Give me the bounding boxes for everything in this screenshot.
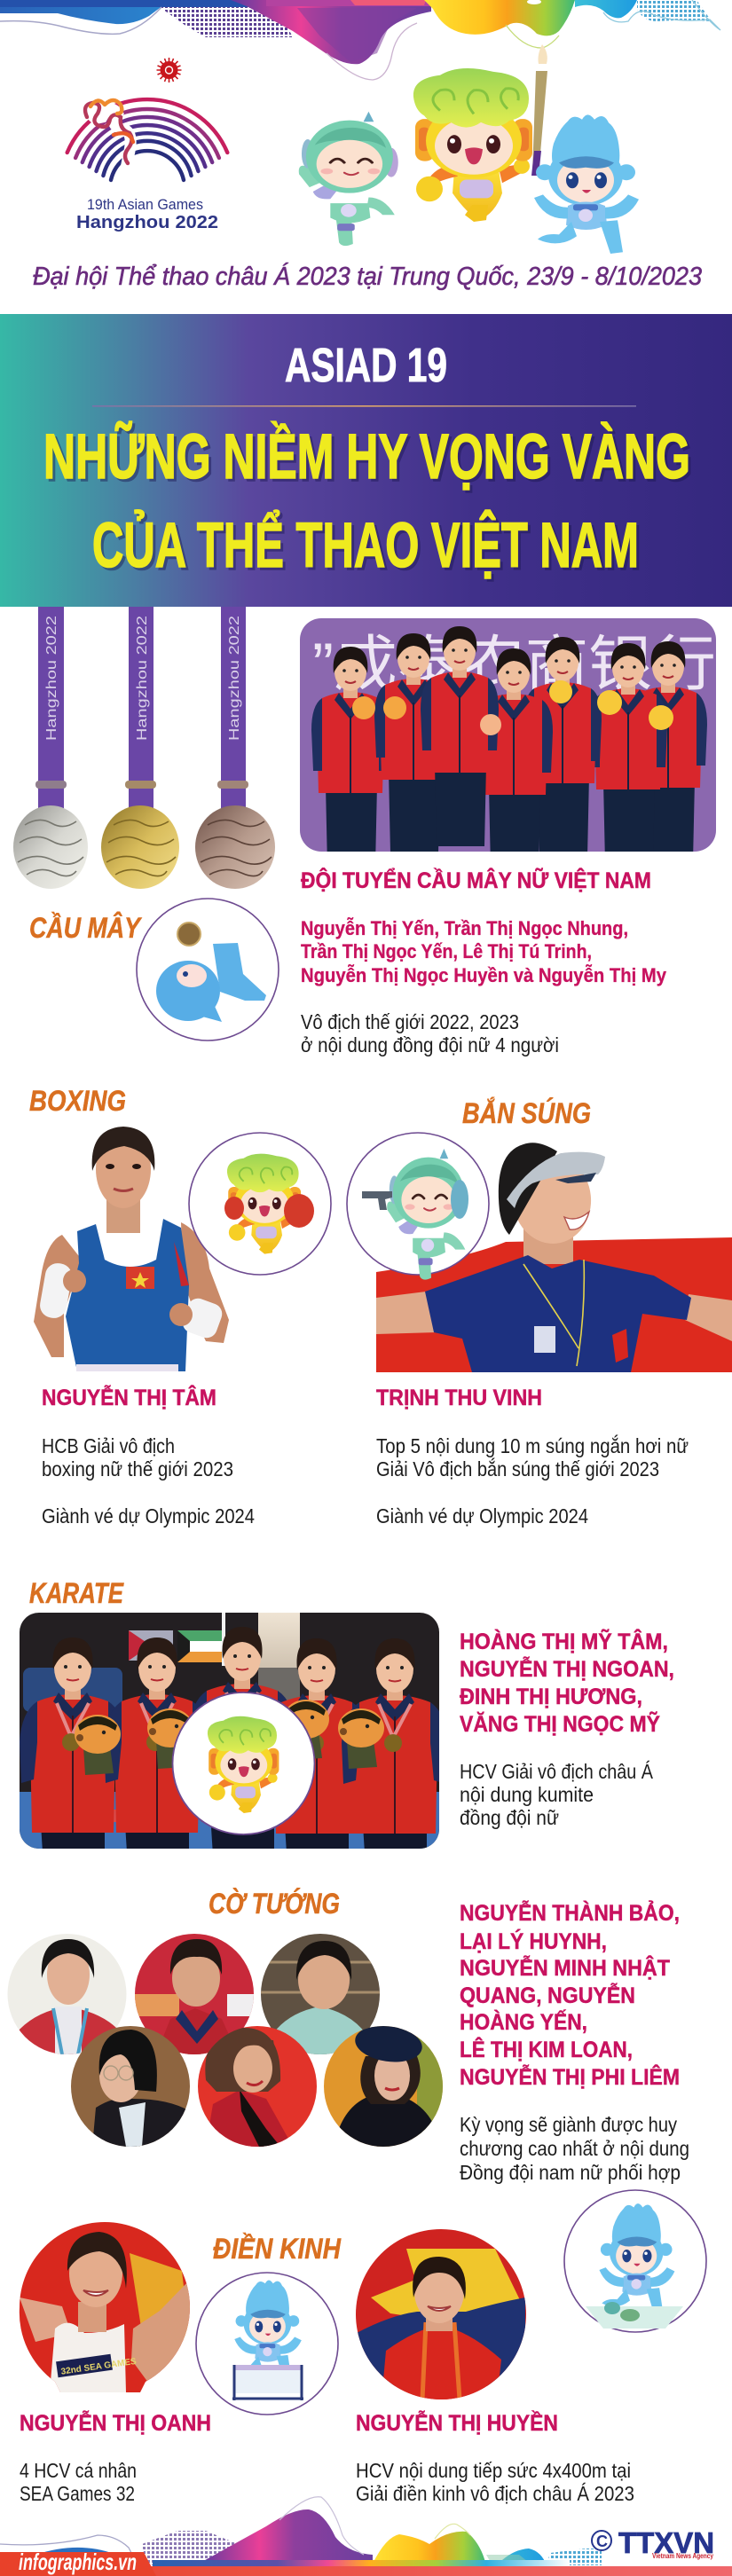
mascot circle: shooting [347, 1133, 489, 1280]
mascot circle: boxing [189, 1133, 331, 1275]
photo: Nguyễn Thị Oanh [18, 2218, 192, 2395]
text block: Nguyễn Thị Tâm: boxing nữ thế giới 2023 [42, 1457, 233, 1480]
text block: Nguyễn Thị Tâm: Giành vé dự Olympic 2024 [42, 1504, 255, 1528]
mascot circle: athletics hurdles [196, 2273, 338, 2415]
text block: Trịnh Thu Vinh [376, 1386, 689, 1528]
footer red bar [0, 2566, 732, 2576]
text block: Nguyễn Thị Oanh: 4 HCV cá nhân [20, 2459, 137, 2482]
portrait 3 [260, 1934, 381, 2054]
logo: 19th Asian Games Hangzhou 2022: Hangzhou 2022 [76, 213, 218, 232]
photo: women's sepak takraw team [300, 618, 716, 868]
text block: Nguyễn Thị Huyền: Giải điền kinh vô địch châu Á 2023 [356, 2482, 634, 2505]
mascot: yellow with torch [413, 44, 547, 222]
subtitle: event dates: Đại hội Thể thao châu Á 2023 tại Trung Quốc, 23/9 - 8/10/2023 [33, 262, 702, 291]
text block: karate names: HOÀNG THỊ MỸ TÂM, [460, 1628, 668, 1654]
logo: 19th Asian Games Hangzhou 2022: 19th Asian Games [87, 196, 203, 213]
mascot circle: sepak takraw [137, 899, 279, 1041]
text block: Nguyễn Thị Tâm: NGUYỄN THỊ TÂM [42, 1384, 216, 1410]
text block: Cầu mây team: Vô địch thế giới 2022, 2023 [301, 1010, 519, 1033]
text block: Cờ tướng names: NGUYỄN THỊ PHI LIÊM [460, 2063, 680, 2090]
text block: Cờ tướng names [460, 1899, 689, 2184]
gold medal: Hangzhou 2022 [135, 616, 150, 741]
heading: ASIAD 19: ASIAD 19 [285, 339, 447, 392]
text block: karate names: NGUYỄN THỊ NGOAN, [460, 1655, 674, 1682]
text block: Trịnh Thu Vinh: Giải Vô địch bắn súng thế giới 2023 [376, 1457, 659, 1480]
panel: title banner [0, 314, 732, 607]
text block: Cờ tướng names: HOÀNG YẾN, [460, 2009, 587, 2035]
text block: Nguyễn Thị Tâm: HCB Giải vô địch [42, 1434, 175, 1457]
gold medal [101, 607, 179, 889]
logo: 19th Asian Games Hangzhou 2022 [67, 99, 227, 232]
portrait 5 [197, 2026, 318, 2147]
bottom rainbow wave [0, 2497, 602, 2567]
footer tab: infographics.vn: infographics.vn [19, 2549, 137, 2575]
section label: Điền kinh: ĐIỀN KINH [213, 2233, 342, 2265]
text block: Cầu mây team: Nguyễn Thị Ngọc Huyền và Nguyễn Thị My [301, 964, 667, 986]
text block: Cờ tướng names: NGUYỄN THÀNH BẢO, [460, 1899, 680, 1926]
icon: asian games sun emblem [156, 58, 181, 82]
text block: Nguyễn Thị Oanh [20, 2409, 211, 2505]
portrait 2 [135, 1934, 256, 2054]
text block: Cầu mây team: ở nội dung đồng đội nữ 4 người [301, 1033, 559, 1056]
logo: TTXVN: C [596, 2533, 608, 2550]
text block: Nguyễn Thị Oanh: SEA Games 32 [20, 2482, 135, 2505]
text block: Cờ tướng names: LÊ THỊ KIM LOAN, [460, 2036, 633, 2062]
text block: Cờ tướng names: Đồng đội nam nữ phối hợp [460, 2161, 681, 2184]
section label: Boxing: BOXING [29, 1085, 126, 1117]
photo: karate team [20, 1613, 439, 1849]
text block: karate names [460, 1628, 674, 1829]
text block: Trịnh Thu Vinh: TRỊNH THU VINH [376, 1386, 542, 1410]
bronze medal [195, 607, 275, 889]
text block: Cầu mây team: Nguyễn Thị Yến, Trần Thị Ngọc Nhung, [301, 917, 628, 939]
section label: Cờ tướng: CỜ TƯỚNG [209, 1888, 340, 1920]
text block: karate names: VĂNG THỊ NGỌC MỸ [460, 1710, 660, 1737]
mascot circle: karate [172, 1692, 314, 1834]
text block: Cờ tướng names: chương cao nhất ở nội dung [460, 2137, 689, 2160]
text block: karate names: HCV Giải vô địch châu Á [460, 1760, 654, 1783]
text block: Cầu mây team [301, 867, 667, 1056]
section label: Karate: KARATE [29, 1577, 124, 1609]
heading: main title [43, 422, 693, 584]
medals with ribbons [13, 607, 275, 889]
text block: Nguyễn Thị Tâm [42, 1384, 255, 1528]
text block: Cờ tướng names: LẠI LÝ HUYNH, [460, 1928, 607, 1954]
photo: Nguyễn Thị Huyền [355, 2228, 528, 2401]
mascot: blue [534, 114, 639, 254]
photo: women's sepak takraw team: ”成泰农商银行 [312, 631, 716, 698]
bronze medal: Hangzhou 2022 [227, 616, 242, 741]
text block: Nguyễn Thị Huyền: HCV nội dung tiếp sức 4x400m tại [356, 2459, 631, 2482]
text block: Cờ tướng names: QUANG, NGUYỄN [460, 1982, 635, 2008]
section label: Cầu mây: CẦU MÂY [29, 912, 142, 944]
mascot: green [299, 112, 398, 246]
text block: Cầu mây team: ĐỘI TUYỂN CẦU MÂY NỮ VIỆT NAM [301, 867, 651, 893]
text block: Cờ tướng names: NGUYỄN MINH NHẬT [460, 1954, 670, 1981]
portrait 6 [323, 2022, 444, 2147]
section label: Bắn súng: BẮN SÚNG [462, 1097, 591, 1129]
photo: boxer Nguyễn Thị Tâm [34, 1127, 229, 1371]
text block: Trịnh Thu Vinh: Top 5 nội dung 10 m súng ngắn hơi nữ [376, 1434, 689, 1457]
text block: Nguyễn Thị Huyền: NGUYỄN THỊ HUYỀN [356, 2409, 558, 2436]
text block: Nguyễn Thị Oanh: NGUYỄN THỊ OANH [20, 2409, 211, 2436]
photo: shooter Trịnh Thu Vinh [376, 1143, 732, 1372]
photo: Nguyễn Thị Oanh: 32nd SEA GAMES [60, 2357, 138, 2377]
portrait 4 [70, 2026, 191, 2147]
text block: karate names: nội dung kumite [460, 1783, 594, 1806]
logo: TTXVN: Vietnam News Agency [652, 2552, 713, 2560]
mascot circle: xiangqi [564, 2190, 706, 2332]
top rainbow wave [0, 0, 720, 80]
text block: Cờ tướng names: Kỳ vọng sẽ giành được huy [460, 2113, 677, 2136]
text block: Trịnh Thu Vinh: Giành vé dự Olympic 2024 [376, 1504, 588, 1528]
text block: Cầu mây team: Trần Thị Ngọc Yến, Lê Thị Tú Trinh, [301, 940, 592, 962]
portrait 1 [7, 1934, 127, 2054]
text block: Nguyễn Thị Huyền [356, 2409, 634, 2505]
silver medal: Hangzhou 2022 [44, 616, 59, 741]
text block: karate names: đồng đội nữ [460, 1806, 559, 1829]
text block: karate names: ĐINH THỊ HƯƠNG, [460, 1685, 642, 1709]
logo: TTXVN: TTXVN [618, 2526, 714, 2559]
silver medal [13, 607, 88, 889]
